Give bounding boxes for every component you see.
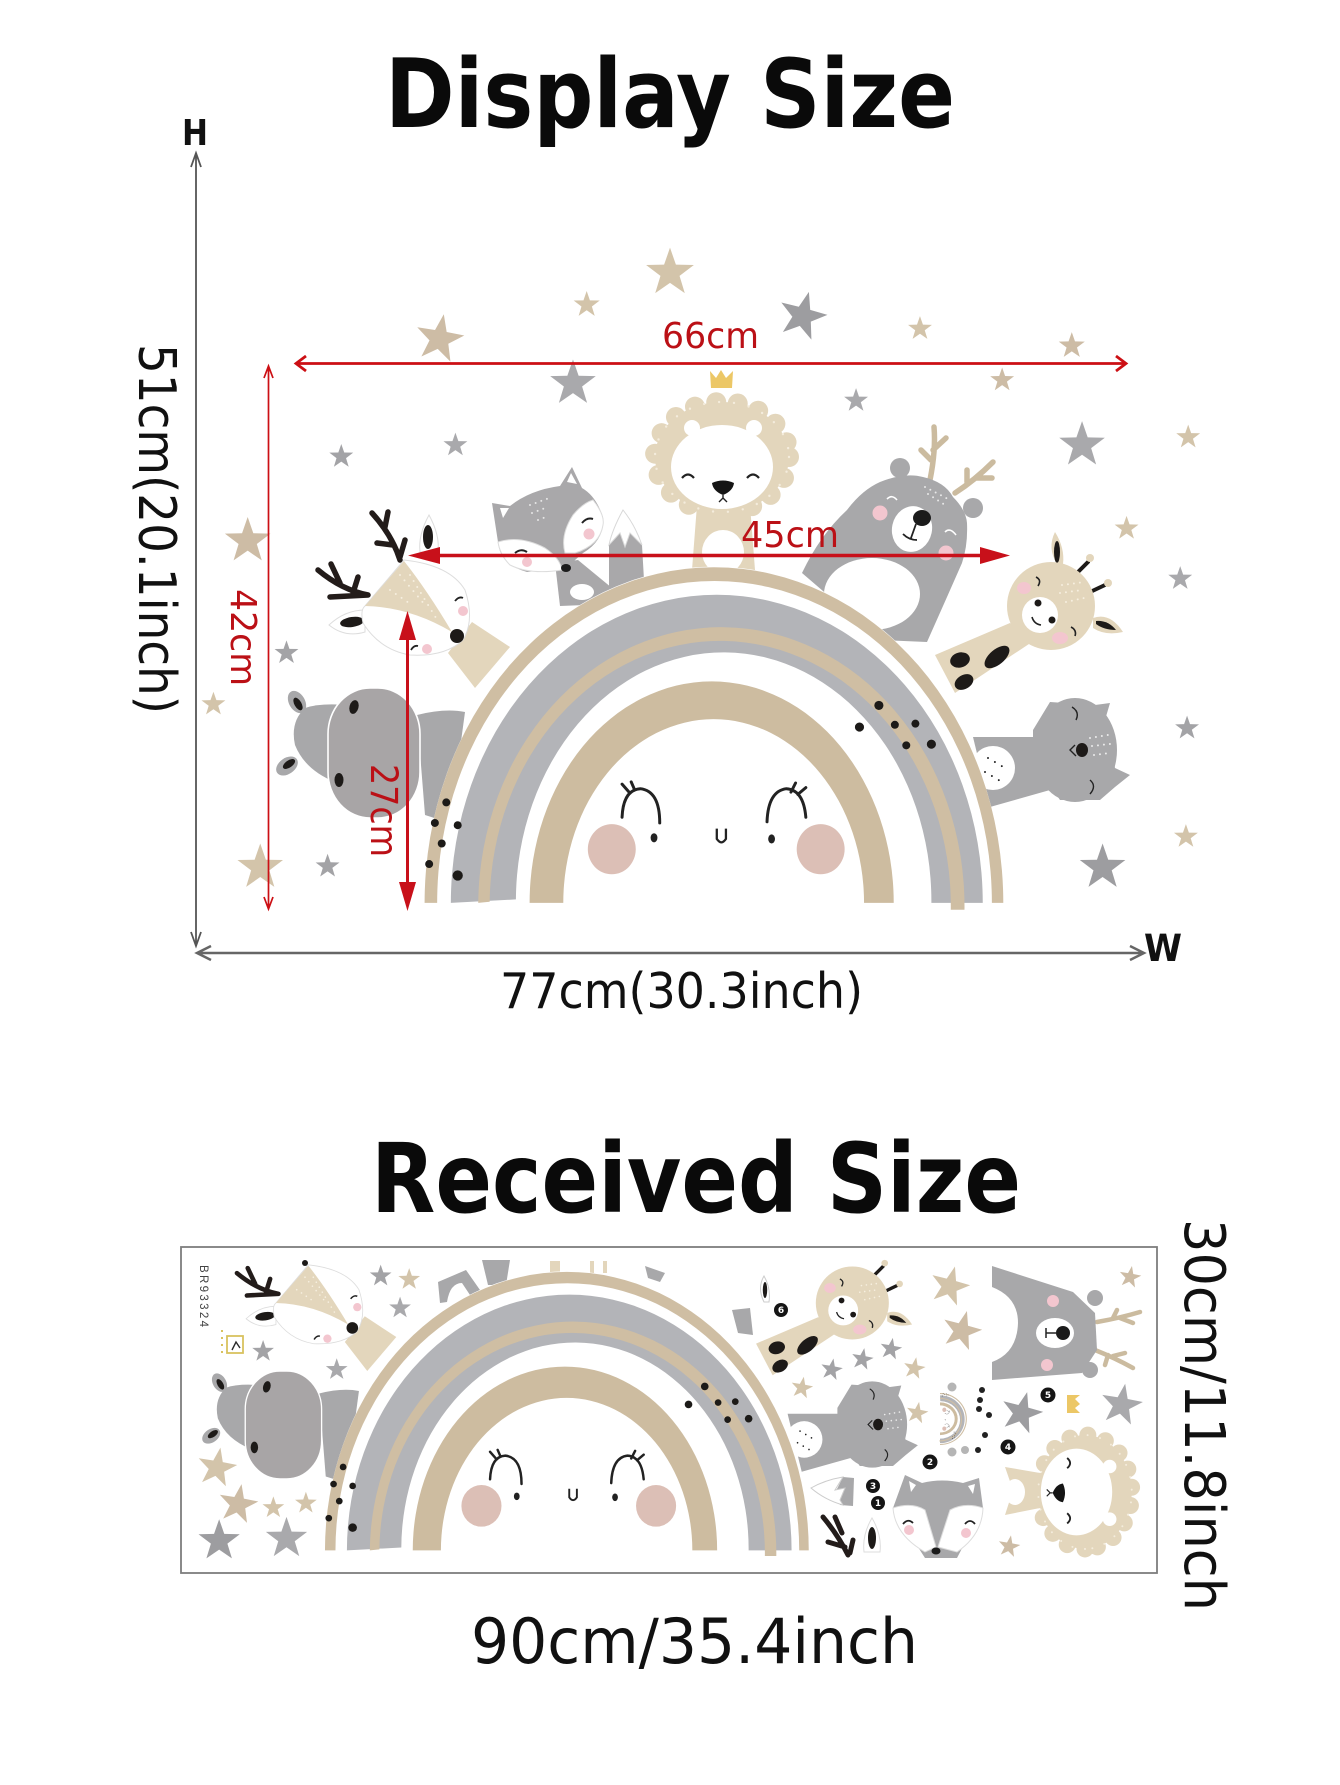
animal: hippo: [273, 688, 465, 823]
sticker: numbered drops: 4: [1005, 1443, 1011, 1453]
sticker: numbered drops: 5: [1045, 1391, 1051, 1401]
sticker lion head: [1038, 1435, 1132, 1549]
dimension: 42cm: [222, 366, 273, 909]
cat body: [973, 737, 1050, 807]
sticker bear body: [992, 1266, 1097, 1380]
sticker bear belly: [992, 1287, 1018, 1362]
rainbow dots: [425, 701, 936, 881]
lion head: [655, 402, 789, 512]
sticker: lion: [1005, 1435, 1132, 1549]
dimension: 66cm: 66cm: [662, 316, 759, 357]
label: sheet height: 30cm/11.8inch: [1171, 1219, 1236, 1611]
giraffe neck, head and horns: [935, 554, 1123, 693]
axis label: H: H: [182, 113, 208, 154]
rainbow tan stripe: [478, 627, 965, 910]
sticker: numbered drops: 1: [875, 1499, 881, 1509]
dimension: 66cm: [296, 316, 1126, 371]
face: eyes: [622, 782, 806, 823]
sticker bear ears: [1082, 1290, 1103, 1378]
sticker: bear: [992, 1266, 1140, 1380]
cat belly: [971, 746, 1015, 790]
hippo head: [294, 704, 345, 782]
sticker: deer: [237, 1265, 396, 1371]
sticker: numbered drops: 2: [927, 1458, 933, 1468]
deer upper antler and ear: [372, 512, 438, 560]
panel: received sticker sheet: [181, 1247, 1157, 1573]
sticker: numbered drops: [774, 1303, 1056, 1510]
animal: bear: [802, 427, 993, 642]
bear belly: [824, 558, 920, 630]
rainbow backing: [425, 567, 1003, 903]
title: Display Size: Display Size: [385, 40, 955, 150]
animal: giraffe: [935, 532, 1123, 693]
face: mouth and tears: [651, 829, 775, 843]
sticker: numbered drops: 3: [870, 1482, 876, 1492]
giraffe top ear: [1051, 532, 1063, 564]
panel: display size diagram: [126, 113, 1200, 1020]
sticker: crown: [1067, 1395, 1080, 1413]
hippo ears: [273, 688, 310, 779]
animal: fox: [492, 467, 644, 606]
bear antlers: [921, 427, 993, 493]
fox body: [555, 560, 612, 606]
rainbow cut-out scraps: [438, 1260, 753, 1335]
sticker: deer antler and ear: [823, 1517, 880, 1555]
width label: 77cm(30.3inch): [500, 963, 863, 1020]
bear body: [802, 475, 967, 642]
sticker: giraffe: [756, 1260, 912, 1375]
hippo nostrils: [334, 699, 360, 787]
product code: BR93324: [197, 1265, 209, 1328]
sticker: numbered drops: 6: [778, 1306, 784, 1316]
label: sheet width: 90cm/35.4inch: [471, 1605, 918, 1678]
dimension: 27cm: 27cm: [362, 764, 405, 857]
sticker: stars: [195, 1261, 1146, 1558]
icon: small yellow cut-out: [222, 1330, 243, 1358]
rainbow with face: [425, 567, 1003, 910]
dimension: 45cm: 45cm: [741, 515, 839, 556]
fox tail: [609, 510, 644, 590]
sticker: hippo: [199, 1371, 359, 1483]
sticker: mini layout guide: [939, 1382, 992, 1456]
dimension: 42cm: 42cm: [222, 589, 263, 686]
icon: lion crown: [710, 370, 733, 388]
cat head: [1033, 698, 1130, 802]
bear face: [872, 487, 956, 560]
sticker: cat: [786, 1381, 918, 1472]
axis label: W: W: [1144, 927, 1182, 970]
rainbow outer tan band: [425, 567, 1003, 903]
dimension: 27cm: [362, 611, 416, 911]
stars around the rainbow: [202, 248, 1200, 887]
sticker: rainbow with face: [325, 1271, 809, 1556]
deer head: [318, 560, 510, 688]
lion body: [692, 505, 755, 574]
sticker bear antlers: [1095, 1310, 1140, 1368]
sticker: fox tail: [811, 1477, 854, 1506]
sticker bear face: [1036, 1295, 1074, 1371]
sticker lion body: [1005, 1467, 1040, 1515]
animal: deer: [318, 512, 510, 688]
hippo snout: [328, 688, 420, 818]
title: Received Size: Received Size: [371, 1123, 1021, 1235]
hippo body: [417, 711, 465, 823]
height label: 51cm(20.1inch): [126, 344, 186, 714]
bear ears: [890, 458, 983, 518]
sticker: giraffe ear: [760, 1276, 769, 1302]
dimension: 45cm: [408, 515, 1010, 564]
axis: width arrow: [197, 946, 1144, 960]
sheet border: [181, 1247, 1157, 1573]
rainbow grey band: [451, 595, 983, 903]
rainbow inner tan band: [530, 681, 894, 903]
sticker: fox face: [893, 1475, 983, 1558]
sticker: deer nose fragment: [302, 1260, 308, 1266]
animal: lion: [655, 402, 789, 574]
animal: cat: [971, 698, 1130, 807]
face: cheeks: [588, 824, 845, 874]
fox head: [492, 467, 603, 572]
axis: height arrow: [191, 153, 201, 946]
